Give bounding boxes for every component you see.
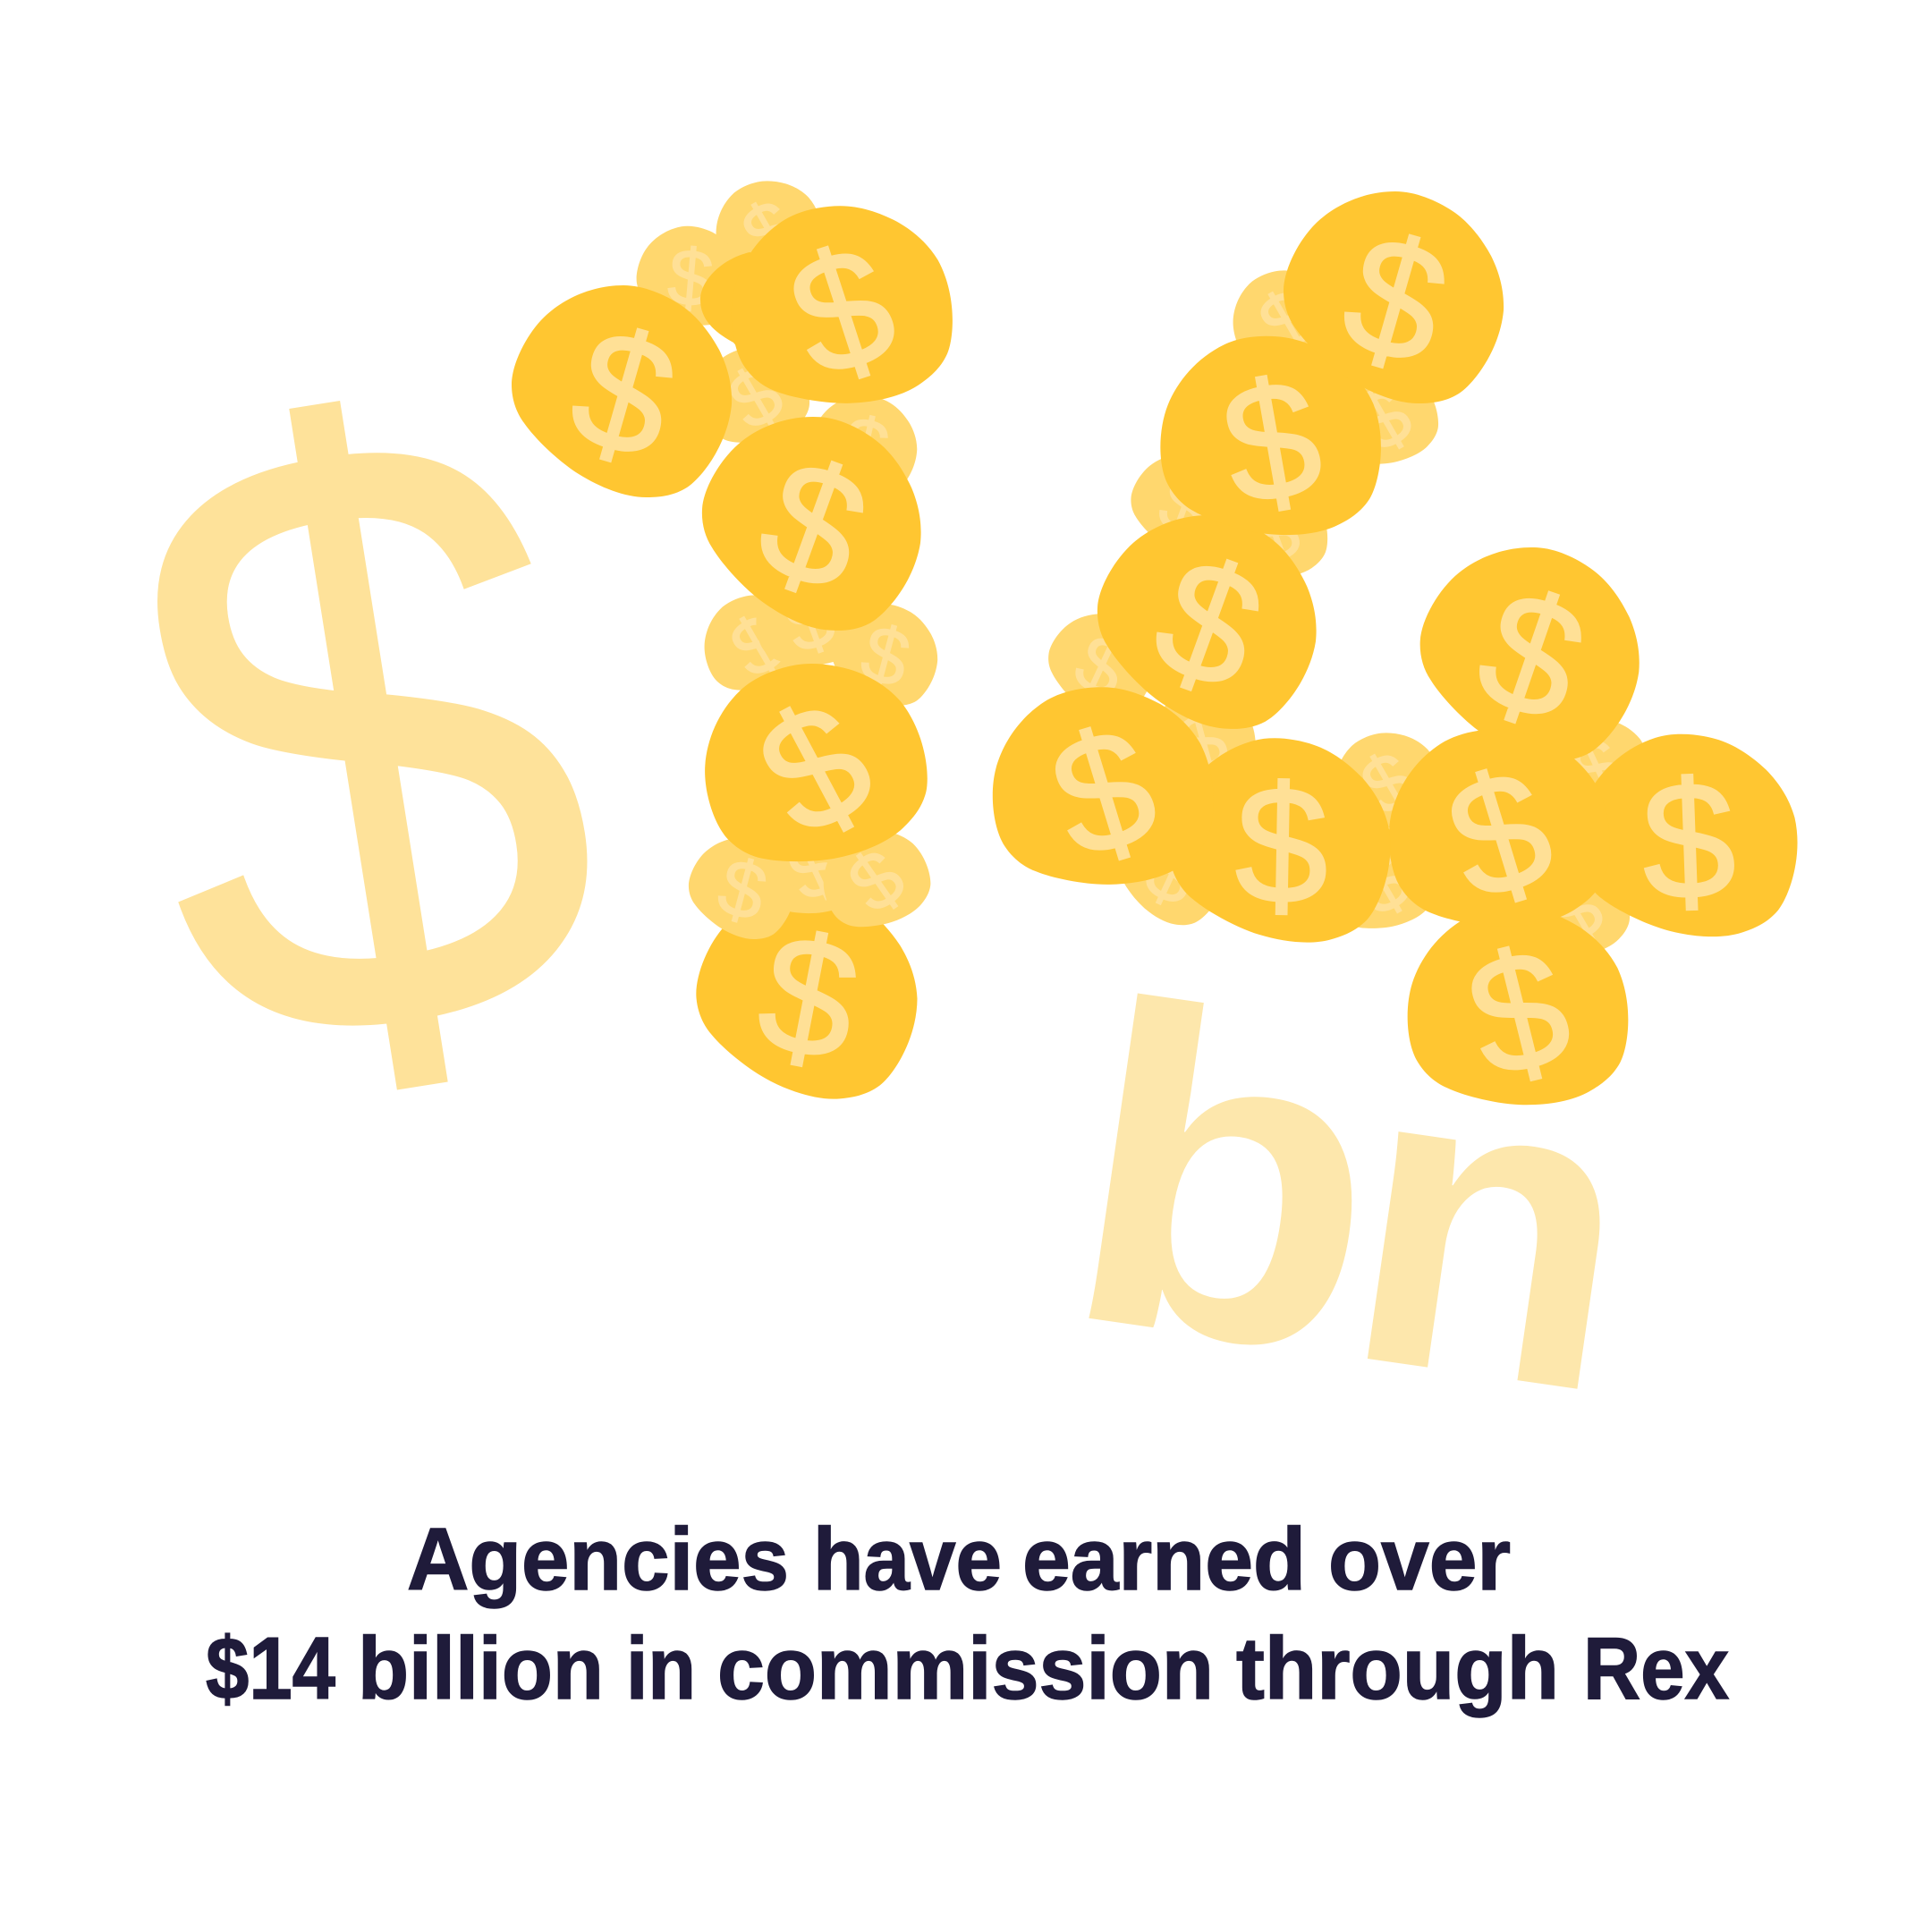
letter b: b [1043,908,1411,1452]
back coin: $ [716,596,799,695]
back coin [809,392,919,499]
coin [951,643,1250,941]
back coin: $ [1534,862,1617,962]
back coin: $ [727,182,810,281]
coin: $ [1032,691,1175,895]
back coin: $ [1063,616,1140,716]
coin: $ [746,898,872,1097]
coin [1284,191,1504,403]
back coin: $ [1343,369,1426,469]
digit 1 made of coins [512,158,990,1110]
coin: $ [1133,521,1284,726]
coin: $ [1233,752,1330,939]
coin: $ [1326,199,1465,402]
back coin: $ [1148,456,1221,555]
back coin: $ [775,819,852,919]
big dollar sign: $ [78,238,648,1237]
caption line 2 [206,1619,1729,1717]
coin [1368,865,1664,1158]
caption line 2: in [626,1619,696,1717]
back coin: $ [1238,484,1310,583]
coin [1089,508,1324,734]
coin: $ [554,292,693,496]
coin: $ [732,665,900,872]
hidden coin edge [700,252,814,385]
coin [689,161,990,460]
coin: $ [1210,343,1334,541]
back coin: $ [1170,693,1236,791]
back coin [1313,710,1460,857]
caption line 1: over [1328,1510,1511,1608]
caption [206,1510,1729,1717]
back coin [802,808,947,953]
letter n: n [1324,966,1660,1484]
back coin: $ [852,607,919,705]
back coin: $ [834,398,897,496]
caption line 2: Rex [1583,1619,1729,1717]
coin: $ [738,423,888,628]
coin [512,285,732,497]
coin [659,615,965,921]
back coin: $ [1244,271,1327,370]
back coin [1522,696,1669,842]
back coin: $ [773,572,845,671]
coin: $ [1452,912,1586,1114]
back coin [694,158,841,305]
back coin: $ [709,841,775,938]
back coin: $ [1346,733,1429,833]
caption line 1: earned [1022,1510,1306,1608]
caption line 1: Agencies [407,1510,789,1608]
caption line 2: billion [358,1619,604,1717]
coin [688,880,926,1110]
coin [1548,705,1824,974]
caption line 1: have [813,1510,1002,1608]
back coin: $ [665,231,716,324]
back coin: $ [833,831,920,930]
back coin: $ [1133,824,1211,923]
back coin [735,548,880,693]
back coin [1127,450,1240,559]
back coin [688,836,795,940]
back coin: $ [714,348,797,447]
back coin [1200,461,1345,606]
back coin [739,796,886,942]
caption line 1 [407,1510,1511,1608]
back coin: $ [1341,834,1424,933]
back coin [681,325,827,471]
digit 4 made of coins [951,191,1824,1158]
back coin [1501,839,1648,986]
back coin [831,603,938,707]
back coin [682,572,829,719]
caption line 2: through [1236,1619,1559,1717]
coin [1347,685,1647,983]
coin [1146,713,1413,974]
back coin: $ [1558,719,1636,818]
back coin [1309,346,1456,493]
coin: $ [1640,747,1738,936]
coin [1414,542,1645,765]
coin: $ [770,209,915,414]
back coin [1130,671,1273,812]
coin [694,410,928,636]
back coin [1111,814,1232,931]
back coin [1211,248,1358,394]
back coin [1308,810,1454,957]
bn label [1043,908,1660,1484]
back coin [628,216,751,337]
caption line 2: commission [717,1619,1214,1717]
caption line 2: $14 [206,1619,335,1717]
coin: $ [1428,733,1572,937]
back coin [1040,606,1161,724]
coin: $ [1458,554,1606,758]
coin [1123,297,1414,584]
